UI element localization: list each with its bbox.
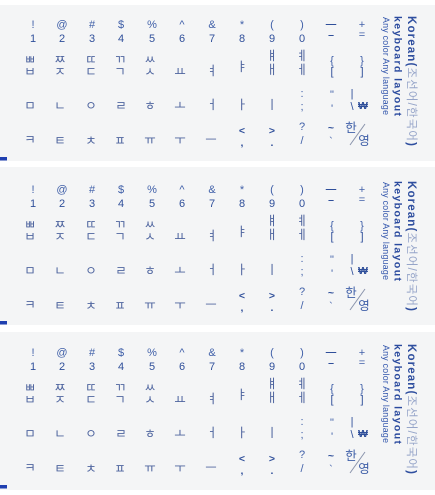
number row: 6: [179, 33, 185, 45]
top letter row: [24, 214, 364, 244]
bottom row: ㅊ: [85, 462, 97, 476]
top letter row: ㄲ: [114, 381, 126, 395]
home row: ㅣ: [266, 263, 278, 277]
top letter row: ㅐ: [266, 391, 278, 405]
number row: [30, 18, 365, 45]
number row: 9: [269, 198, 275, 210]
home row: ㅁ: [24, 427, 36, 441]
top letter row: ㅛ: [174, 65, 186, 79]
number row: &: [208, 184, 216, 196]
bottom row: [24, 121, 334, 149]
bottom row: `: [329, 464, 333, 476]
bottom row: /: [300, 463, 304, 475]
bottom row: >: [269, 453, 275, 465]
number row: 8: [239, 198, 245, 210]
bottom row: >: [269, 290, 275, 302]
bottom row: ㅡ: [205, 133, 217, 147]
number row: —: [326, 18, 337, 30]
top letter row: ㅖ: [296, 377, 308, 391]
top letter row: ㅒ: [266, 214, 278, 228]
top letter row: ㅔ: [296, 63, 308, 77]
home row: |: [351, 88, 353, 100]
home row: \: [350, 429, 354, 441]
home row: ㅗ: [174, 427, 186, 441]
bottom row: `: [329, 136, 333, 148]
number row: !: [31, 184, 35, 196]
sticker sheet 1: [0, 5, 435, 161]
top letter row: ㅔ: [296, 391, 308, 405]
number row: (: [270, 184, 274, 196]
top letter row: ㅆ: [144, 53, 156, 67]
han/yeong key: 영: [358, 462, 370, 476]
home row: ㅇ: [85, 427, 97, 441]
bottom row: .: [271, 137, 274, 149]
home row: ₩: [358, 428, 368, 440]
home row: ㅗ: [174, 99, 186, 113]
title: Korean keyboard layout: [381, 16, 418, 146]
bottom row: `: [329, 301, 333, 313]
number row: 1: [30, 33, 36, 45]
top letter row: {: [330, 220, 334, 232]
home row: ": [330, 417, 334, 429]
number row: 4: [118, 198, 124, 210]
number row: #: [89, 19, 96, 31]
blue registration mark: [0, 485, 7, 488]
number row: $: [118, 184, 124, 196]
top letter row: {: [330, 383, 334, 395]
bottom row: ㅠ: [144, 461, 156, 475]
sticker sheet 2: [0, 167, 435, 325]
top letter row: ㅂ: [24, 230, 36, 244]
home row: ㄹ: [115, 264, 127, 278]
number row: =: [359, 29, 365, 41]
home row: ㅗ: [174, 264, 186, 278]
bottom row: ㅍ: [114, 462, 126, 476]
number row: 8: [239, 33, 245, 45]
top letter row: ㄲ: [114, 218, 126, 232]
top letter row: ]: [360, 66, 364, 78]
top letter row: ㅖ: [296, 214, 308, 228]
number row: —: [326, 346, 337, 358]
top letter row: }: [360, 55, 364, 67]
home row: [24, 416, 368, 443]
number row: %: [147, 347, 157, 359]
top letter row: [: [330, 394, 334, 406]
number row: 3: [89, 361, 95, 373]
sticker sheet 3: [0, 332, 435, 490]
home row: [24, 253, 368, 280]
number row: 2: [59, 198, 65, 210]
title: Korean keyboard layout: Any color Any language: [381, 17, 391, 115]
home row: ㅇ: [85, 99, 97, 113]
top letter row: ㅈ: [54, 393, 66, 407]
number row: (: [270, 347, 274, 359]
top letter row: ㅃ: [24, 381, 36, 395]
number row: –: [328, 357, 334, 369]
number row: =: [359, 357, 365, 369]
top letter row: ㅅ: [144, 230, 156, 244]
bottom row: /: [300, 300, 304, 312]
top letter row: ㅒ: [266, 377, 278, 391]
bottom row: <: [239, 290, 245, 302]
top letter row: ㅃ: [24, 218, 36, 232]
number row: 0: [299, 361, 305, 373]
number row: !: [31, 19, 35, 31]
top letter row: ㅅ: [144, 65, 156, 79]
number row: $: [118, 19, 124, 31]
top letter row: ㅔ: [296, 228, 308, 242]
top letter row: ㅑ: [236, 225, 248, 239]
title: Korean keyboard layout: Any color Any language: [381, 345, 391, 443]
number row: @: [56, 184, 68, 196]
home row: ㄹ: [115, 427, 127, 441]
home row: :: [300, 88, 304, 100]
title: Korean keyboard layout: keyboard layout: [392, 16, 404, 116]
bottom row: ㅠ: [144, 298, 156, 312]
han/yeong key: [345, 121, 370, 148]
number row: –: [328, 29, 334, 41]
top letter row: ㅈ: [54, 230, 66, 244]
number row: #: [89, 184, 96, 196]
home row: ㄴ: [54, 99, 66, 113]
home row: |: [351, 253, 353, 265]
bottom row: ?: [299, 121, 305, 133]
home row: ㄴ: [54, 427, 66, 441]
number row: +: [359, 19, 365, 31]
home row: ": [330, 254, 334, 266]
top letter row: [24, 49, 364, 79]
number row: 5: [149, 198, 155, 210]
han/yeong key: 한: [345, 449, 357, 463]
home row: ": [330, 89, 334, 101]
number row: [30, 183, 365, 210]
bottom row: ~: [328, 122, 334, 134]
top letter row: ㄸ: [85, 53, 97, 67]
bottom row: ㅡ: [205, 298, 217, 312]
number row: 4: [118, 361, 124, 373]
number row: (: [270, 19, 274, 31]
number row: –: [328, 194, 334, 206]
han/yeong key: 한: [345, 286, 357, 300]
number row: 3: [89, 33, 95, 45]
bottom row: ㅡ: [205, 461, 217, 475]
title: Korean keyboard layout: Korean( 조선어/한국어 ): [405, 16, 418, 146]
home row: ;: [300, 429, 304, 441]
top letter row: [: [330, 66, 334, 78]
bottom row: ,: [241, 137, 244, 149]
top letter row: ㅂ: [24, 393, 36, 407]
bottom row: ㅍ: [114, 134, 126, 148]
number row: 8: [239, 361, 245, 373]
number row: —: [326, 183, 337, 195]
number row: +: [359, 347, 365, 359]
home row: ': [331, 268, 333, 280]
top letter row: ㅐ: [266, 228, 278, 242]
home row: ㅏ: [236, 263, 248, 277]
number row: 1: [30, 198, 36, 210]
number row: *: [240, 347, 245, 359]
number row: ): [300, 347, 304, 359]
title: Korean keyboard layout: Korean( 조선어/한국어 ): [405, 181, 418, 311]
top letter row: ㄷ: [85, 393, 97, 407]
number row: 2: [59, 33, 65, 45]
top letter row: ㅈ: [54, 65, 66, 79]
number row: *: [240, 184, 245, 196]
number row: 7: [209, 33, 215, 45]
top letter row: }: [360, 220, 364, 232]
han/yeong key: 한: [345, 121, 357, 135]
number row: @: [56, 19, 68, 31]
bottom row: ㅜ: [174, 298, 186, 312]
home row: [24, 88, 368, 115]
top letter row: ㄷ: [85, 65, 97, 79]
bottom row: ㅋ: [24, 461, 36, 475]
title: Korean keyboard layout: keyboard layout: [392, 344, 404, 444]
number row: %: [147, 184, 157, 196]
number row: 9: [269, 361, 275, 373]
home row: ': [331, 103, 333, 115]
blue registration mark: [0, 157, 7, 160]
top letter row: ㄸ: [85, 218, 97, 232]
home row: |: [351, 416, 353, 428]
number row: 0: [299, 198, 305, 210]
blue registration mark: [0, 321, 7, 324]
number row: %: [147, 19, 157, 31]
home row: ㅏ: [236, 98, 248, 112]
top letter row: ㄸ: [85, 381, 97, 395]
top letter row: ㄲ: [114, 53, 126, 67]
number row: $: [118, 347, 124, 359]
home row: :: [300, 253, 304, 265]
bottom row: [24, 286, 334, 314]
number row: &: [208, 19, 216, 31]
home row: ㅎ: [144, 427, 156, 441]
top letter row: ㅛ: [174, 393, 186, 407]
bottom row: >: [269, 125, 275, 137]
bottom row: .: [271, 465, 274, 477]
home row: ㅏ: [236, 426, 248, 440]
bottom row: ㅌ: [54, 299, 66, 313]
top letter row: ㅕ: [206, 392, 218, 406]
number row: 9: [269, 33, 275, 45]
top letter row: ㅕ: [206, 64, 218, 78]
home row: ₩: [358, 100, 368, 112]
top letter row: ㅆ: [144, 218, 156, 232]
number row: +: [359, 184, 365, 196]
number row: 6: [179, 198, 185, 210]
top letter row: {: [330, 55, 334, 67]
bottom row: <: [239, 125, 245, 137]
bottom row: ~: [328, 287, 334, 299]
number row: 1: [30, 361, 36, 373]
bottom row: ?: [299, 286, 305, 298]
bottom row: ㅍ: [114, 299, 126, 313]
top letter row: ㅃ: [24, 53, 36, 67]
top letter row: }: [360, 383, 364, 395]
bottom row: ,: [241, 465, 244, 477]
number row: 4: [118, 33, 124, 45]
home row: ;: [300, 266, 304, 278]
home row: \: [350, 266, 354, 278]
top letter row: ㅑ: [236, 388, 248, 402]
top letter row: ㅒ: [266, 49, 278, 63]
number row: #: [89, 347, 96, 359]
bottom row: ㅠ: [144, 133, 156, 147]
bottom row: ㅜ: [174, 461, 186, 475]
number row: 5: [149, 33, 155, 45]
home row: ': [331, 431, 333, 443]
bottom row: ㅊ: [85, 134, 97, 148]
home row: ㅣ: [266, 98, 278, 112]
bottom row: [24, 449, 334, 477]
top letter row: ㅖ: [296, 49, 308, 63]
bottom row: .: [271, 302, 274, 314]
top letter row: ㅕ: [206, 229, 218, 243]
title: Korean keyboard layout: Korean( 조선어/한국어 ): [405, 344, 418, 474]
bottom row: ㅋ: [24, 133, 36, 147]
title: Korean keyboard layout: [381, 344, 418, 474]
bottom row: ?: [299, 449, 305, 461]
top letter row: ㅐ: [266, 63, 278, 77]
han/yeong key: [345, 449, 370, 476]
title: Korean keyboard layout: keyboard layout: [392, 181, 404, 282]
title: Korean keyboard layout: [381, 181, 418, 311]
home row: ㄹ: [115, 99, 127, 113]
number row: 7: [209, 361, 215, 373]
number row: 7: [209, 198, 215, 210]
top letter row: ㄱ: [114, 393, 126, 407]
top letter row: ㄱ: [114, 65, 126, 79]
home row: ㅁ: [24, 99, 36, 113]
top letter row: ]: [360, 394, 364, 406]
number row: &: [208, 347, 216, 359]
home row: ㅣ: [266, 426, 278, 440]
top letter row: ㅉ: [54, 381, 66, 395]
home row: ㅇ: [85, 264, 97, 278]
top letter row: ㄷ: [85, 230, 97, 244]
bottom row: ㅜ: [174, 133, 186, 147]
top letter row: [: [330, 231, 334, 243]
home row: ㄴ: [54, 264, 66, 278]
home row: ㅎ: [144, 99, 156, 113]
number row: ): [300, 184, 304, 196]
bottom row: ㅊ: [85, 299, 97, 313]
top letter row: ㄱ: [114, 230, 126, 244]
bottom row: ㅌ: [54, 462, 66, 476]
bottom row: ㅋ: [24, 298, 36, 312]
top letter row: ㅆ: [144, 381, 156, 395]
home row: :: [300, 416, 304, 428]
number row: !: [31, 347, 35, 359]
number row: [30, 346, 365, 373]
home row: ㅓ: [206, 98, 218, 112]
home row: ㅓ: [206, 263, 218, 277]
top letter row: ㅉ: [54, 53, 66, 67]
bottom row: <: [239, 453, 245, 465]
bottom row: ㅌ: [54, 134, 66, 148]
number row: 2: [59, 361, 65, 373]
bottom row: ~: [328, 450, 334, 462]
top letter row: ㅉ: [54, 218, 66, 232]
top letter row: ㅑ: [236, 60, 248, 74]
han/yeong key: 영: [358, 299, 370, 313]
top letter row: ]: [360, 231, 364, 243]
home row: ;: [300, 101, 304, 113]
title: Korean keyboard layout: Any color Any language: [381, 182, 391, 280]
number row: 5: [149, 361, 155, 373]
number row: ^: [179, 347, 185, 359]
top letter row: ㅛ: [174, 230, 186, 244]
top letter row: ㅅ: [144, 393, 156, 407]
home row: ㅎ: [144, 264, 156, 278]
bottom row: ,: [241, 302, 244, 314]
home row: ₩: [358, 265, 368, 277]
number row: @: [56, 347, 68, 359]
home row: \: [350, 101, 354, 113]
bottom row: /: [300, 135, 304, 147]
number row: 0: [299, 33, 305, 45]
home row: ㅓ: [206, 426, 218, 440]
han/yeong key: 영: [358, 134, 370, 148]
home row: ㅁ: [24, 264, 36, 278]
number row: ): [300, 19, 304, 31]
number row: =: [359, 194, 365, 206]
top letter row: [24, 377, 364, 407]
number row: ^: [179, 184, 185, 196]
number row: 3: [89, 198, 95, 210]
number row: ^: [179, 19, 185, 31]
number row: 6: [179, 361, 185, 373]
number row: *: [240, 19, 245, 31]
top letter row: ㅂ: [24, 65, 36, 79]
han/yeong key: [345, 286, 370, 313]
